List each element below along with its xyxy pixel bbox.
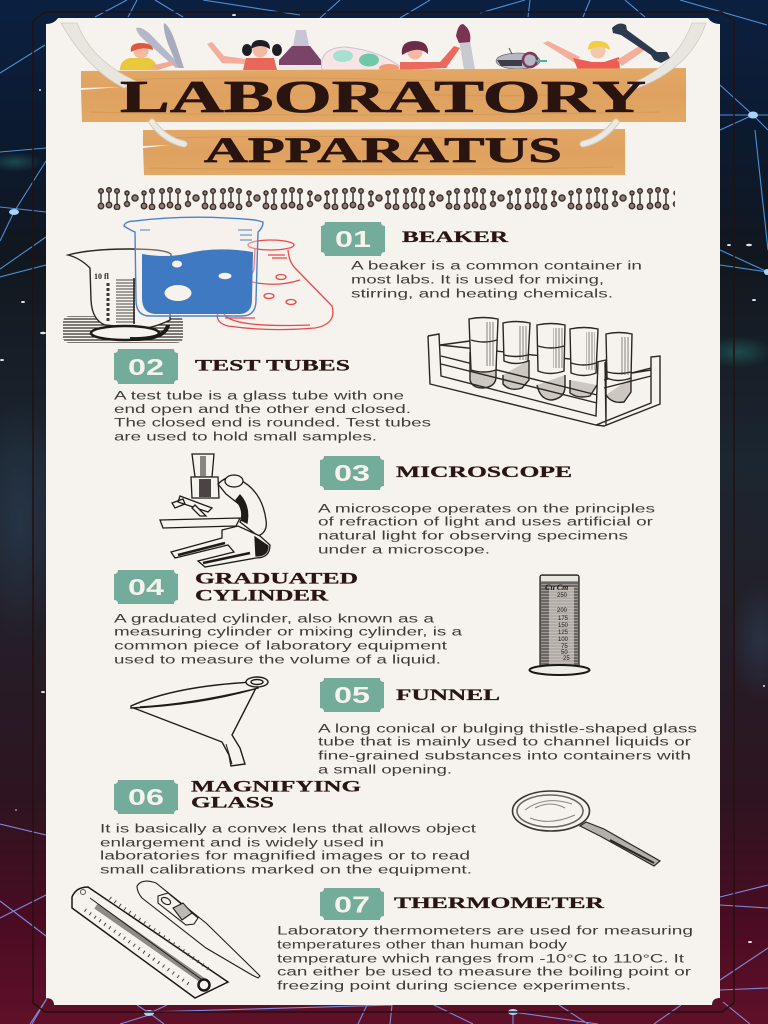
section 07: thermometer (277, 888, 693, 992)
description: stirring, and heating chemicals. (351, 288, 613, 300)
icon: paint palette (321, 47, 405, 72)
description: small calibrations marked on the equipment. (100, 864, 472, 876)
description: a small opening. (318, 764, 452, 776)
illustration: test tube rack (428, 318, 660, 426)
description: Laboratory thermometers are used for measuring (277, 926, 693, 938)
description: used to measure the volume of a liquid. (114, 654, 441, 666)
badge 03: 03 (334, 460, 370, 486)
badge 06: 06 (128, 784, 164, 810)
wooden plank: apparatus (143, 129, 625, 175)
rack frame (428, 334, 660, 426)
description: can either be used to measure the boiling point or (277, 966, 691, 978)
icon: scissors (136, 23, 184, 68)
rope: upper (61, 23, 706, 90)
wooden plank: laboratory (81, 68, 686, 122)
description: A beaker is a common container in (351, 260, 642, 272)
icon: engraved beaker (63, 249, 183, 343)
icon: robot gadget (496, 48, 547, 69)
illustration: graduated cylinder: 125 (558, 630, 569, 636)
illustration: magnifying glass (512, 791, 660, 866)
description (114, 390, 431, 444)
title: laboratory: LABORATORY (120, 72, 646, 122)
illustration: graduated cylinder: 25 (563, 656, 570, 662)
rope: lower (152, 122, 616, 144)
description: laboratories for magnified images or to read (100, 850, 470, 862)
description (318, 724, 697, 776)
section 01: beaker (321, 222, 642, 300)
character: woman with brush (400, 24, 475, 70)
description: A graduated cylinder, also known as a (114, 614, 435, 626)
section 06: magnifying glass (100, 778, 477, 876)
badge 06 (114, 780, 178, 814)
badge 07: 07 (334, 892, 370, 918)
badge 07 (320, 888, 384, 920)
description (100, 824, 477, 876)
illustration: graduated cylinder: 100 (558, 637, 569, 643)
illustration: graduated cylinder: 75 (561, 644, 568, 650)
heading: MAGNIFYING (191, 778, 361, 796)
description: most labs. It is used for mixing, (351, 274, 604, 286)
badge 04 (114, 570, 178, 604)
section 02: test tubes (114, 349, 431, 444)
illustration: microscope (160, 454, 270, 567)
heading: THERMOMETER (394, 895, 605, 912)
heading: CYLINDER (195, 588, 329, 604)
illustration: graduated cylinder: 200 (557, 608, 568, 614)
title: apparatus: APPARATUS (204, 130, 562, 170)
description: temperatures other than human body (277, 940, 567, 952)
character: boy in yellow (120, 43, 174, 70)
icon: red flask (217, 240, 333, 330)
description: A microscope operates on the principles (318, 504, 655, 516)
icon: strip thermometer (72, 887, 228, 998)
description: temperature which ranges from -10°C to 110°C. It (277, 954, 685, 966)
badge 02: 02 (128, 354, 164, 380)
illustration: thermometers (72, 881, 260, 998)
section 03: microscope (318, 456, 655, 556)
icon: blue beaker (124, 217, 263, 316)
illustration: graduated cylinder (530, 575, 590, 675)
description: freezing point during science experiments. (277, 980, 631, 992)
character: girl with pigtails (207, 40, 282, 70)
description: natural light for observing specimens (318, 530, 628, 542)
illustration: graduated cylinder: 150 (558, 623, 569, 629)
heading: GRADUATED (195, 570, 358, 588)
description: enlargement and is widely used in (100, 838, 384, 850)
illustration: funnel (131, 677, 268, 766)
header illustration: characters and tools (120, 23, 670, 72)
icon: digital thermometer (137, 881, 260, 978)
heading: BEAKER (402, 229, 509, 246)
illustration: graduated cylinder: 250 (557, 593, 568, 599)
description: It is basically a convex lens that allows object (100, 824, 477, 836)
section 04: graduated cylinder (114, 570, 463, 666)
description: A test tube is a glass tube with one (114, 390, 404, 402)
description: The closed end is rounded. Test tubes (114, 418, 431, 430)
badge 04: 04 (128, 574, 164, 600)
section 05: funnel (318, 678, 697, 776)
divider: pin row (97, 187, 675, 210)
badge 03 (320, 456, 384, 490)
icon: engraved beaker: 10 fl (94, 272, 110, 281)
description: are used to hold small samples. (114, 432, 377, 444)
description: measuring cylinder or mixing cylinder, is a (114, 626, 463, 638)
description (351, 260, 642, 300)
description: of refraction of light and uses artificial or (318, 516, 653, 528)
icon: dropper bottle (279, 30, 321, 70)
heading: MICROSCOPE (396, 464, 572, 481)
illustration: graduated cylinder: 175 (558, 616, 569, 622)
heading: FUNNEL (396, 687, 500, 704)
description (114, 614, 463, 666)
heading (195, 570, 358, 604)
description: tube that is mainly used to channel liquids or (318, 736, 691, 748)
heading: GLASS (191, 794, 274, 812)
badge 05: 05 (334, 682, 370, 708)
badge 05 (320, 678, 384, 712)
illustration: beakers and flask (63, 217, 333, 343)
heading (191, 778, 361, 812)
character: boy with wrench (543, 24, 670, 70)
badge 01: 01 (335, 226, 371, 252)
description (277, 926, 693, 992)
description: under a microscope. (318, 544, 490, 556)
badge 01 (321, 222, 385, 256)
description: A long conical or bulging thistle-shaped glass (318, 724, 697, 736)
badge 02 (114, 349, 178, 384)
description: end open and the other end closed. (114, 404, 411, 416)
illustration: graduated cylinder: Cu Cm (545, 583, 568, 592)
description: common piece of laboratory equipment (114, 640, 448, 652)
description: fine-grained substances into containers with (318, 750, 691, 762)
heading: TEST TUBES (195, 358, 350, 374)
illustration: graduated cylinder: 50 (561, 650, 568, 656)
description (318, 504, 655, 556)
